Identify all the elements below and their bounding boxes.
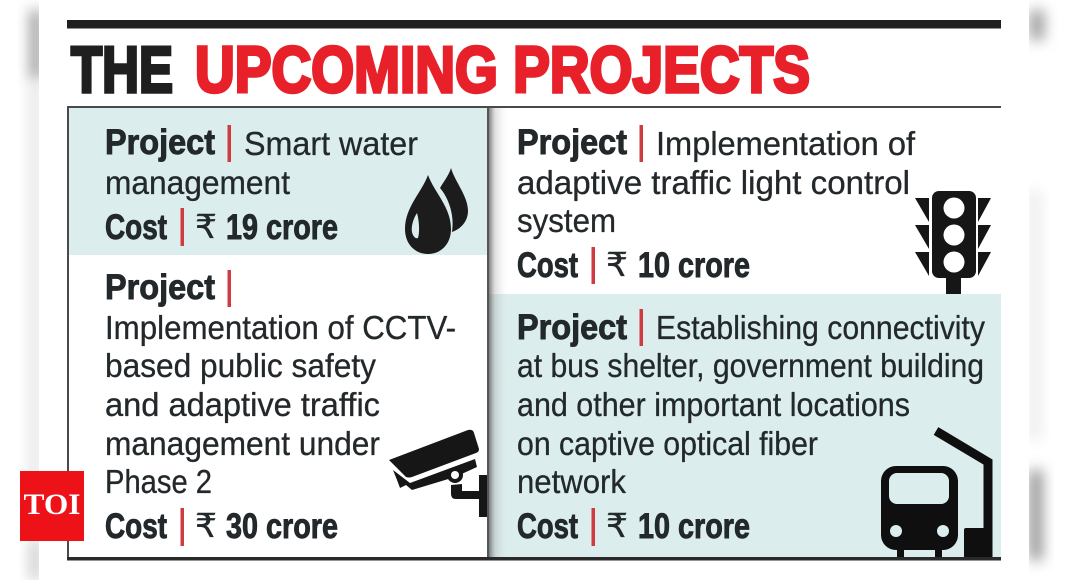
project heading: Project: [105, 268, 215, 307]
cost: 10 crore: [638, 246, 750, 285]
TOI logo: [20, 471, 84, 541]
panel: adaptive traffic light control: [487, 107, 1001, 294]
cost: 19 crore: [226, 208, 338, 247]
project description: Smart water: [244, 125, 418, 162]
cost: 30 crore: [226, 507, 338, 546]
project description: management under: [105, 425, 380, 462]
cost: ₹: [606, 246, 628, 283]
panel: optical fiber connectivity: [487, 294, 1001, 558]
cost: [105, 507, 338, 546]
project description: management: [105, 164, 290, 201]
project description: [105, 309, 456, 500]
panel: CCTV public safety: [69, 255, 487, 558]
cost: [517, 507, 750, 546]
cost: [105, 208, 338, 247]
cost: [517, 246, 750, 285]
project description: [517, 125, 916, 239]
cost: Cost: [517, 507, 578, 546]
project description: Establishing connectivity: [656, 309, 985, 346]
project description: [105, 125, 418, 201]
cost: Cost: [105, 208, 167, 247]
top rule: [67, 20, 1001, 28]
cost: Cost: [517, 246, 578, 285]
title: THE: [71, 33, 173, 106]
project description: and other important locations: [517, 386, 910, 423]
project heading: Project: [517, 308, 627, 347]
icon: CCTV camera: [389, 430, 487, 517]
title: UPCOMING PROJECTS: [195, 33, 810, 106]
project description: Phase 2: [105, 463, 212, 500]
icon: water drops: [405, 168, 468, 254]
project heading: Project: [517, 123, 627, 162]
TOI logo: TOI: [24, 488, 80, 521]
project description: on captive optical fiber: [517, 425, 818, 462]
panel: smart water management: [69, 107, 487, 255]
frame lines: [67, 106, 1001, 560]
cost: Cost: [105, 507, 167, 546]
icon: bus stop: [881, 431, 992, 558]
project description: Implementation of: [656, 125, 916, 162]
project description: Implementation of CCTV-: [105, 309, 456, 346]
cost: ₹: [195, 507, 217, 544]
project description: [517, 309, 985, 500]
cost: 10 crore: [638, 507, 750, 546]
project description: at bus shelter, government building: [517, 347, 984, 384]
project description: adaptive traffic light control: [517, 164, 910, 201]
icon: traffic light: [915, 191, 991, 294]
cost: ₹: [606, 507, 628, 544]
project description: network: [517, 463, 626, 500]
project description: and adaptive traffic: [105, 386, 380, 423]
project heading: Project: [105, 123, 215, 162]
project description: based public safety: [105, 347, 376, 384]
project description: system: [517, 202, 616, 239]
cost: ₹: [195, 208, 217, 245]
